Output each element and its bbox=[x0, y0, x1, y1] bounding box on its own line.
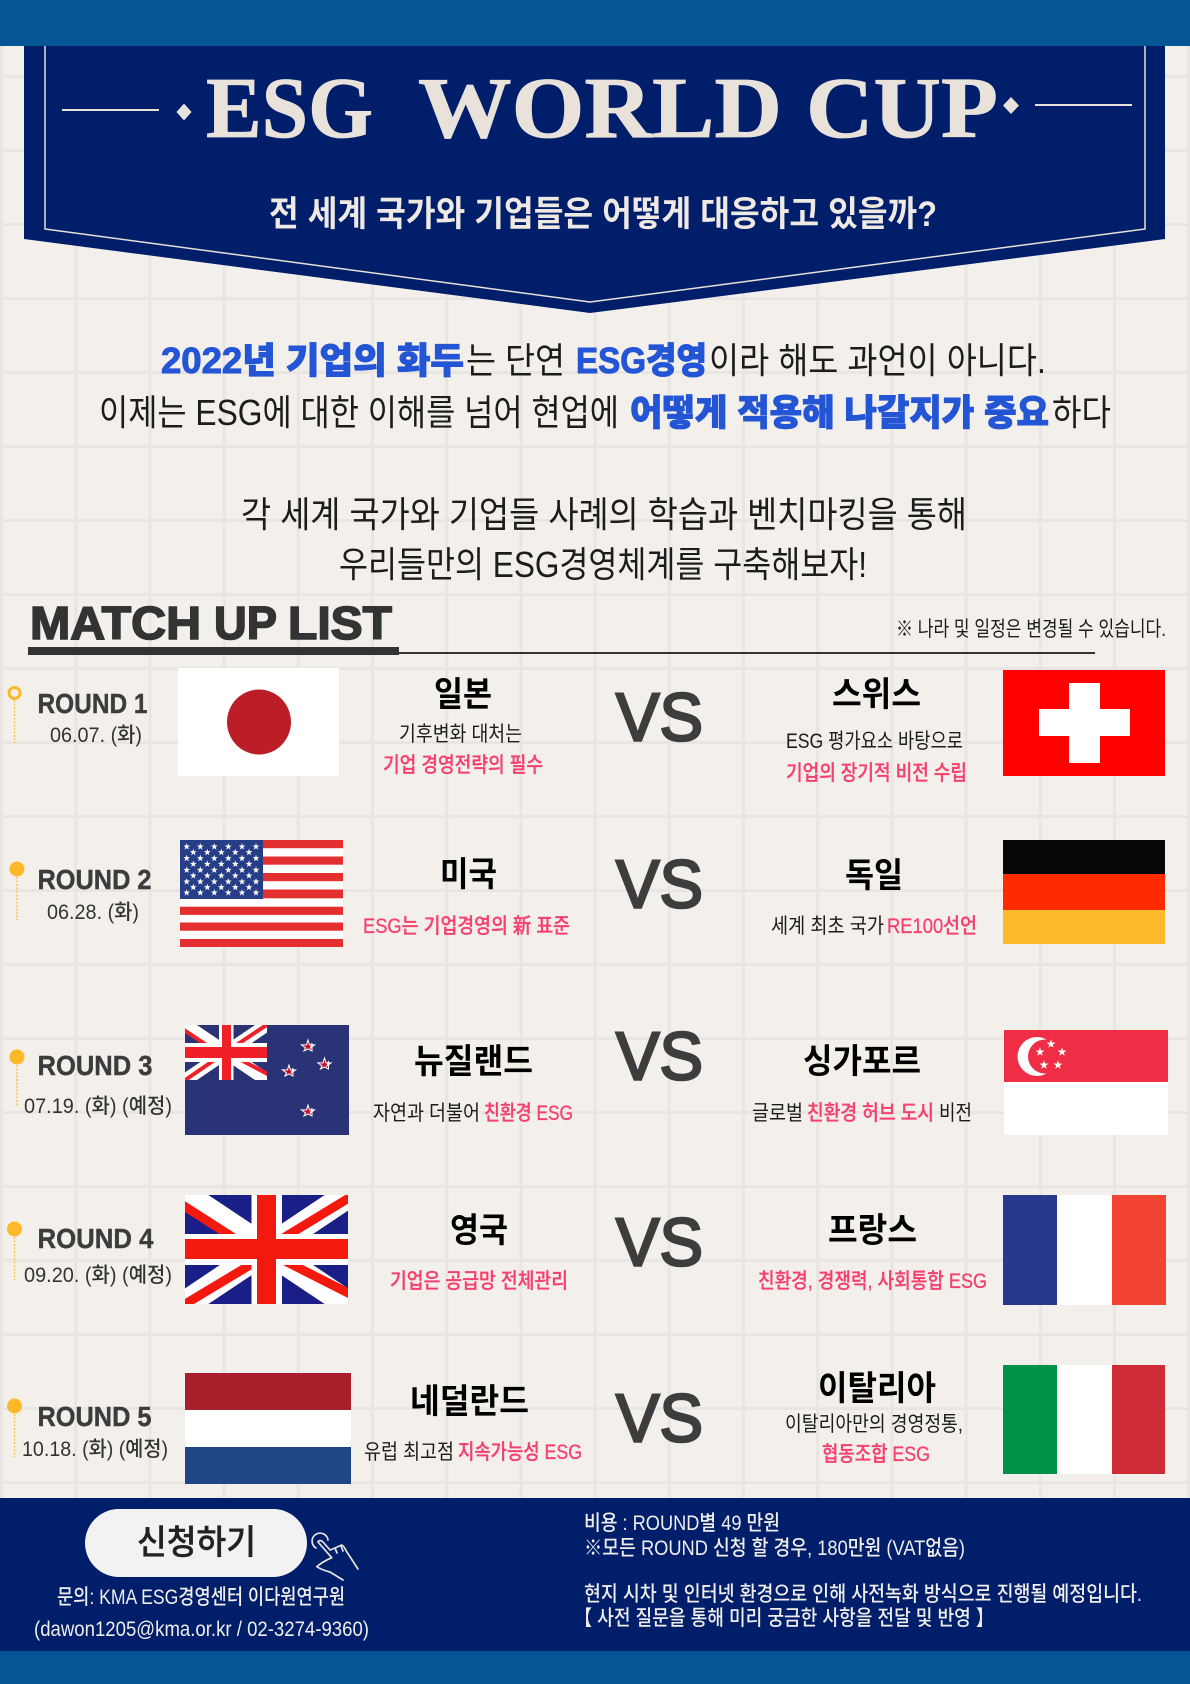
team: New Zealand: 뉴질랜드 bbox=[414, 1043, 533, 1081]
top colour band bbox=[0, 0, 1190, 46]
footer panel bbox=[0, 1498, 1190, 1651]
intro line 2: 어떻게 적용해 나갈지가 중요 bbox=[630, 392, 1049, 433]
team: France bbox=[758, 1212, 987, 1293]
flag: Netherlands bbox=[185, 1373, 351, 1484]
title bbox=[206, 59, 998, 156]
flag: Italy bbox=[1003, 1365, 1165, 1474]
round 4 label bbox=[24, 1223, 172, 1287]
round 3 marker bbox=[10, 1050, 24, 1107]
team: UK: 영국 bbox=[450, 1212, 508, 1250]
vs: VS bbox=[616, 1380, 703, 1456]
flag: New Zealand bbox=[185, 1025, 349, 1135]
team: Japan bbox=[383, 676, 543, 777]
fee text: ※모든 ROUND 신청 할 경우, 180만원 (VAT없음) bbox=[584, 1537, 965, 1560]
intro text block bbox=[99, 340, 1111, 585]
round 5 marker bbox=[7, 1398, 22, 1457]
flag: Singapore bbox=[1004, 1030, 1168, 1135]
team: Germany: 세계 최초 국가 bbox=[771, 915, 884, 938]
team: USA bbox=[363, 856, 570, 938]
notice text bbox=[574, 1583, 1142, 1630]
banner header bbox=[24, 46, 1165, 313]
team: New Zealand: 자연과 더불어 bbox=[373, 1102, 480, 1125]
team: Germany: 독일 bbox=[845, 857, 903, 895]
round 4 label: ROUND 4 bbox=[38, 1223, 154, 1254]
title ornament left bbox=[62, 104, 192, 120]
team: Italy: 이탈리아만의 경영정통, bbox=[785, 1413, 963, 1436]
team: Japan: 기업 경영전략의 필수 bbox=[383, 754, 543, 777]
round 4 row bbox=[7, 1195, 1166, 1305]
team: Switzerland: ESG 평가요소 바탕으로 bbox=[786, 730, 963, 753]
apply button: 신청하기 bbox=[137, 1524, 256, 1562]
team: France: 친환경, 경쟁력, 사회통합 ESG bbox=[758, 1270, 987, 1293]
round 3 label bbox=[24, 1050, 172, 1118]
team: USA: 미국 bbox=[440, 856, 497, 894]
team: Netherlands: 네덜란드 bbox=[410, 1383, 529, 1421]
team: New Zealand: 친환경 ESG bbox=[484, 1102, 573, 1125]
team: Japan: 기후변화 대처는 bbox=[399, 723, 522, 746]
team: Singapore: 비전 bbox=[939, 1102, 972, 1125]
title: ESG bbox=[206, 59, 373, 156]
team: Switzerland: 스위스 bbox=[832, 676, 921, 714]
round 3 label: ROUND 3 bbox=[38, 1050, 152, 1081]
round 1 label: ROUND 1 bbox=[38, 688, 148, 719]
intro line 4: 우리들만의 ESG경영체계를 구축해보자! bbox=[339, 544, 867, 585]
round 2 label: ROUND 2 bbox=[38, 864, 152, 895]
fee text bbox=[584, 1512, 965, 1560]
team: Switzerland bbox=[786, 676, 967, 785]
section heading: match up list: MATCH bbox=[30, 597, 201, 649]
round 5 label: ROUND 5 bbox=[38, 1401, 152, 1432]
round 1 label bbox=[38, 688, 148, 747]
team: Singapore: 친환경 허브 도시 bbox=[807, 1102, 934, 1125]
team: Singapore bbox=[752, 1043, 972, 1125]
team: Italy: 이탈리아 bbox=[818, 1370, 936, 1408]
banner inner outline bbox=[45, 46, 1145, 302]
banner shape bbox=[24, 46, 1165, 313]
team: Germany: RE100선언 bbox=[887, 915, 977, 938]
contact text: 문의: KMA ESG경영센터 이다원연구원 bbox=[57, 1586, 345, 1609]
icon: pointing hand bbox=[312, 1533, 358, 1580]
flag: France bbox=[1003, 1195, 1166, 1305]
round 2 label: 06.28. (화) bbox=[47, 901, 139, 924]
team: Italy: 협동조합 ESG bbox=[822, 1443, 930, 1466]
team: Singapore: 싱가포르 bbox=[803, 1043, 921, 1081]
fee text: 비용 : ROUND별 49 만원 bbox=[584, 1512, 780, 1535]
notice text: 【 사전 질문을 통해 미리 궁금한 사항을 전달 및 반영 】 bbox=[574, 1607, 994, 1630]
team: Netherlands bbox=[364, 1383, 582, 1464]
round 1 label: 06.07. (화) bbox=[50, 724, 142, 747]
round 1 marker bbox=[9, 688, 20, 743]
round 1 row bbox=[9, 668, 1165, 785]
round 3 label: 07.19. (화) (예정) bbox=[24, 1095, 172, 1118]
vs: VS bbox=[616, 1018, 703, 1094]
apply button bbox=[85, 1509, 307, 1577]
round 4 marker bbox=[7, 1222, 22, 1280]
team: Italy bbox=[785, 1370, 963, 1466]
flag: UK bbox=[185, 1195, 348, 1304]
team: UK: 기업은 공급망 전체관리 bbox=[390, 1270, 568, 1293]
vs: VS bbox=[616, 680, 703, 756]
section heading: match up list: LIST bbox=[288, 597, 392, 649]
team: Japan: 일본 bbox=[434, 676, 492, 714]
subtitle: 전 세계 국가와 기업들은 어떻게 대응하고 있을까? bbox=[269, 195, 937, 234]
intro line 3: 각 세계 국가와 기업들 사례의 학습과 벤치마킹을 통해 bbox=[241, 494, 967, 535]
flag: Germany bbox=[1003, 840, 1165, 944]
round 5 label: 10.18. (화) (예정) bbox=[22, 1438, 168, 1461]
intro line 1: 2022년 기업의 화두 bbox=[161, 340, 464, 381]
round 4 label: 09.20. (화) (예정) bbox=[24, 1264, 172, 1287]
intro line 1: 이라 해도 과언이 아니다. bbox=[709, 340, 1046, 381]
intro line 2: 하다 bbox=[1052, 392, 1111, 433]
round 2 row bbox=[10, 840, 1165, 947]
round 2 marker bbox=[10, 862, 24, 920]
team: Germany bbox=[771, 857, 977, 938]
intro line 2: 이제는 ESG에 대한 이해를 넘어 현업에 bbox=[99, 392, 619, 433]
section heading: match up list: UP bbox=[214, 597, 277, 649]
contact text: (dawon1205@kma.or.kr / 02-3274-9360) bbox=[34, 1618, 369, 1641]
vs: VS bbox=[616, 1204, 703, 1280]
flag: Japan bbox=[178, 668, 339, 776]
contact text bbox=[34, 1586, 369, 1641]
intro line 1: ESG경영 bbox=[576, 340, 707, 381]
intro line 1 bbox=[161, 340, 1046, 381]
title: CUP bbox=[806, 59, 998, 156]
bottom colour band bbox=[0, 1651, 1190, 1684]
round 2 label bbox=[38, 864, 152, 924]
flag: Switzerland bbox=[1003, 670, 1165, 776]
team: Switzerland: 기업의 장기적 비전 수립 bbox=[786, 762, 967, 785]
intro line 1: 는 단연 bbox=[466, 340, 565, 381]
round 3 row bbox=[10, 1018, 1168, 1135]
round 5 label bbox=[22, 1401, 168, 1461]
flag: USA bbox=[180, 840, 343, 947]
footer background bbox=[0, 1498, 1190, 1651]
round 5 row bbox=[7, 1365, 1165, 1484]
section heading: match up list bbox=[28, 597, 1095, 655]
team: USA: ESG는 기업경영의 新 표준 bbox=[363, 915, 570, 938]
team: New Zealand bbox=[373, 1043, 573, 1125]
intro line 2 bbox=[99, 392, 1111, 433]
team: France: 프랑스 bbox=[828, 1212, 917, 1250]
title: WORLD bbox=[418, 59, 782, 156]
vs: VS bbox=[616, 846, 703, 922]
team: Singapore: 글로벌 bbox=[752, 1102, 803, 1125]
team: Netherlands: 유럽 최고점 bbox=[364, 1441, 454, 1464]
title ornament right bbox=[1003, 97, 1132, 114]
team: Netherlands: 지속가능성 ESG bbox=[458, 1441, 582, 1464]
team: UK bbox=[390, 1212, 568, 1293]
